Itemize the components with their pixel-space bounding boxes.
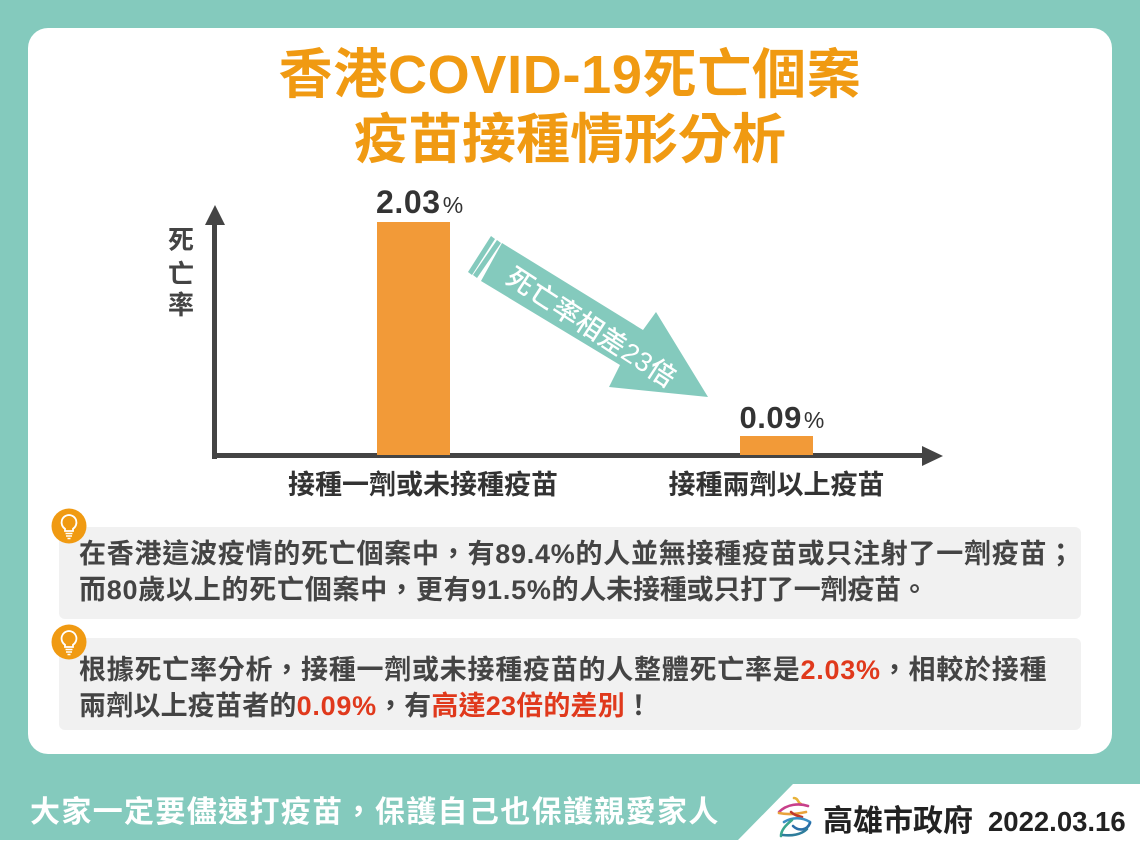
value: 0.09%: 0.09% <box>740 400 824 435</box>
title <box>279 45 861 170</box>
footer organisation and date: 高雄市政府 2022.03.16 <box>823 805 1126 838</box>
category label: one dose or unvaccinated: 接種一劑或未接種疫苗 <box>288 470 558 500</box>
icon: light bulb 2 <box>52 624 86 660</box>
note panel: death rate comparison <box>59 638 1081 730</box>
note panel: vaccination share of deaths <box>59 527 1081 619</box>
footer white tab <box>0 784 1140 855</box>
arrow: 23 times difference: 死亡率相差23倍 <box>501 262 681 394</box>
note panel: death rate comparison: 根據死亡率分析，接種一劑或未接種疫苗的人整體死亡率是2.03%，相較於接種 <box>79 655 1047 685</box>
y axis label: 率 <box>168 290 194 320</box>
footer slogan: 大家一定要儘速打疫苗，保護自己也保護親愛家人 <box>30 796 720 829</box>
bar chart <box>168 184 943 500</box>
y axis label: 死 <box>168 225 194 255</box>
y axis label: 亡 <box>168 259 194 289</box>
y axis label <box>168 225 194 320</box>
note panel: vaccination share of deaths: 而80歲以上的死亡個案中，更有91.5%的人未接種或只打了一劑疫苗。 <box>79 575 928 605</box>
arrow: 23 times difference <box>468 236 708 397</box>
title: 香港COVID-19死亡個案 <box>279 45 861 105</box>
value: 2.03%: 2.03% <box>376 184 463 220</box>
bar: one dose or unvaccinated <box>377 222 450 455</box>
x axis <box>212 446 943 466</box>
y axis <box>205 205 225 459</box>
icon: light bulb 1 <box>52 508 86 544</box>
note panel: vaccination share of deaths: 在香港這波疫情的死亡個案中，有89.4%的人並無接種疫苗或只注射了一劑疫苗； <box>79 539 1075 569</box>
icon: Kaohsiung city logo <box>778 796 812 838</box>
category label: two or more doses: 接種兩劑以上疫苗 <box>668 470 884 500</box>
title: 疫苗接種情形分析 <box>354 110 786 170</box>
bar: two or more doses <box>740 436 813 455</box>
note panel: death rate comparison: 兩劑以上疫苗者的0.09%，有高達23倍的差別！ <box>79 691 652 721</box>
